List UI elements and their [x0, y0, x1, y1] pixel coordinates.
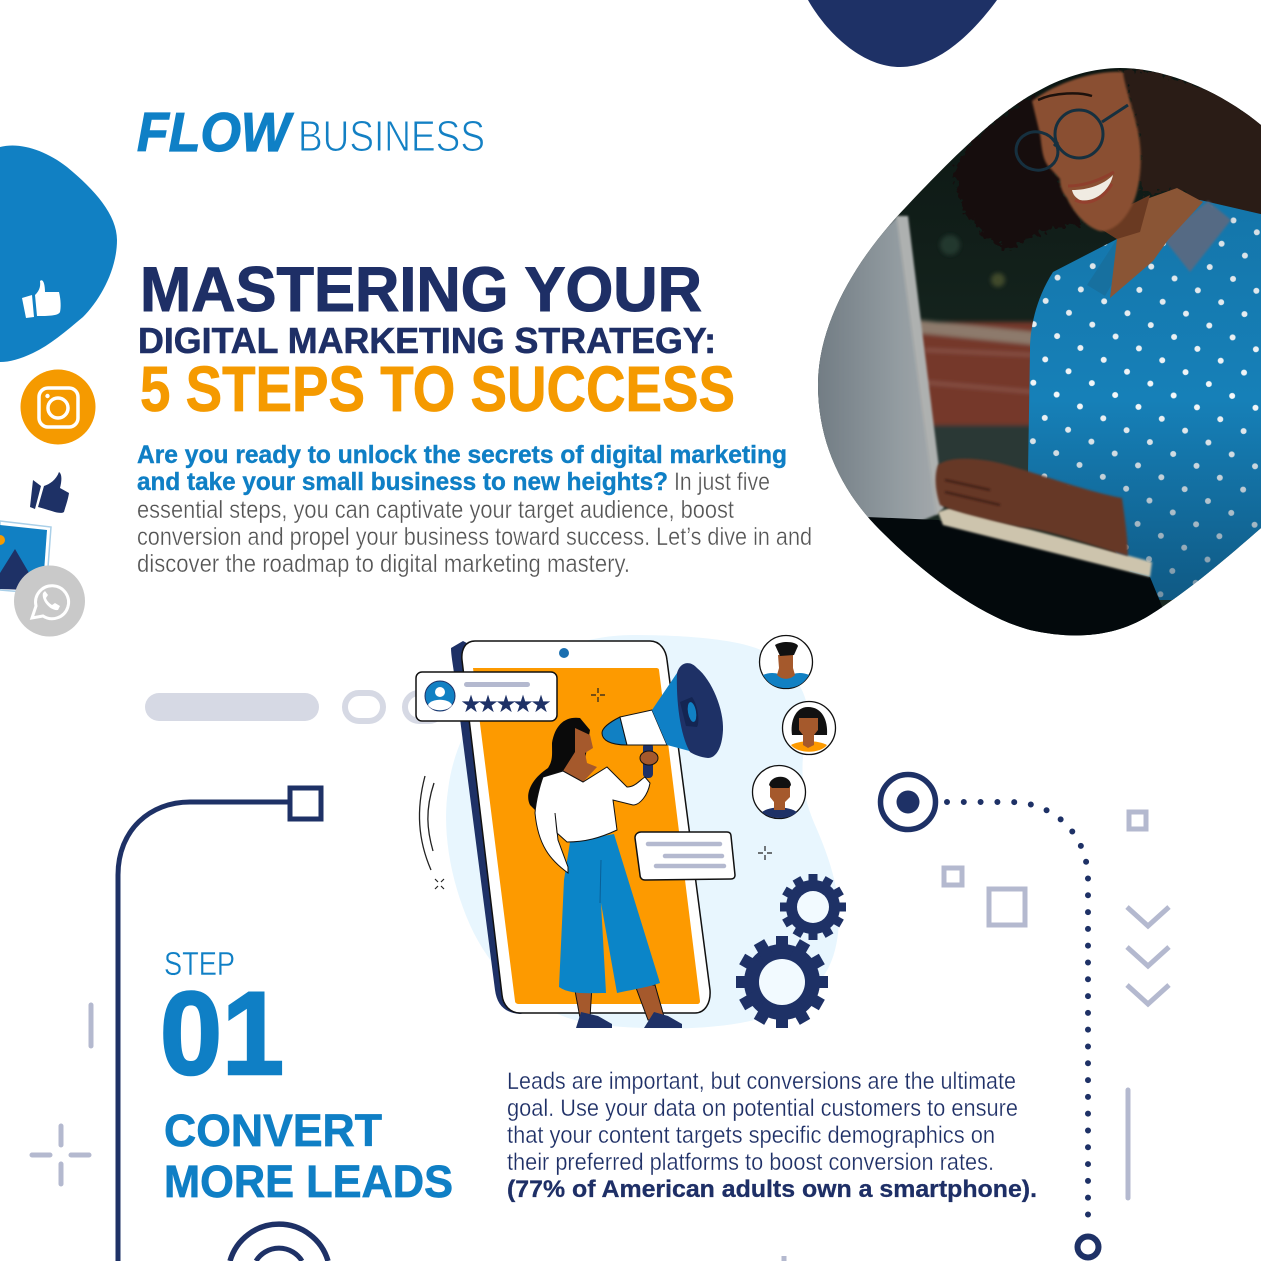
audience avatar 2 [782, 702, 836, 754]
collar [1163, 201, 1231, 272]
logo: Flow Business: FLOW [137, 101, 294, 163]
small gear [780, 874, 846, 940]
neck [1104, 188, 1203, 298]
glasses [1012, 105, 1128, 175]
hand and arm [936, 459, 1128, 556]
review card: ★ [460, 691, 482, 718]
logo: Flow Business: BUSINESS [298, 112, 485, 161]
hair right [1122, 70, 1261, 232]
bottom partial circle [230, 1224, 328, 1261]
hair left [955, 95, 1085, 250]
megaphone [602, 663, 723, 778]
step number and heading: CONVERT [164, 1105, 382, 1156]
audience avatar 1 [760, 636, 812, 688]
motion lines [419, 776, 434, 870]
laptop screen [818, 216, 938, 535]
intro paragraph: In just five [674, 468, 770, 496]
title: DIGITAL MARKETING STRATEGY: [138, 320, 716, 361]
intro paragraph [137, 441, 812, 578]
step body text [507, 1068, 1037, 1203]
step body text: that your content targets specific demographics on [507, 1122, 995, 1149]
title: MASTERING YOUR [140, 255, 702, 325]
top navy blob [808, 0, 997, 67]
logo: Flow Business [137, 101, 485, 163]
intro paragraph: essential steps, you can captivate your target audience, boost [137, 496, 734, 524]
title: 5 STEPS TO SUCCESS [140, 353, 735, 425]
icon: whatsapp grey circle [14, 566, 85, 636]
review card: ★ [477, 691, 499, 718]
step body text: their preferred platforms to boost conversion rates. [507, 1149, 994, 1176]
step body text: (77% of American adults own a smartphone). [507, 1176, 1037, 1203]
icon: navy thumbs up [30, 472, 69, 513]
phone [451, 641, 710, 1014]
title [138, 255, 735, 425]
step number and heading: STEP [164, 945, 235, 982]
icon: tilted picture card [0, 521, 51, 594]
step bracket line [118, 788, 321, 1261]
grey square decorations [944, 812, 1146, 925]
intro paragraph: and take your small business to new heights? [137, 468, 668, 496]
woman [528, 718, 682, 1028]
sparkles [435, 688, 772, 889]
target and dotted connector [880, 774, 1098, 1258]
shirt [1028, 200, 1261, 600]
review card: ★ [495, 691, 517, 718]
intro paragraph: discover the roadmap to digital marketing mastery. [137, 550, 630, 578]
large gear [736, 936, 828, 1028]
review card: ★ [512, 691, 534, 718]
left blue blob with thumbs up [0, 146, 117, 362]
intro paragraph: Are you ready to unlock the secrets of digital marketing [137, 441, 787, 469]
grey pill and ring decorations [145, 693, 443, 721]
chevron arrows [1127, 907, 1169, 1004]
review card: ★ [530, 691, 552, 718]
laptop base [868, 517, 1162, 636]
audience avatar 3 [752, 766, 806, 818]
review card [416, 672, 557, 721]
step number and heading: 01 [160, 968, 284, 1100]
grey lines and plus decoration [32, 1005, 1128, 1261]
step number and heading [160, 945, 453, 1207]
intro paragraph: conversion and propel your business toward success. Let’s dive in and [137, 523, 812, 551]
photo: woman using a laptop [806, 60, 1261, 650]
step body text: Leads are important, but conversions are the ultimate [507, 1068, 1016, 1095]
step body text: goal. Use your data on potential customers to ensure [507, 1095, 1018, 1122]
icon: instagram orange circle [20, 370, 96, 444]
illustration: woman with megaphone on phone [416, 635, 846, 1029]
icon: white thumbs up [22, 280, 61, 318]
face [1032, 72, 1141, 231]
pale blue background blob [446, 635, 839, 1029]
message card [635, 832, 735, 880]
step number and heading: MORE LEADS [164, 1156, 453, 1207]
